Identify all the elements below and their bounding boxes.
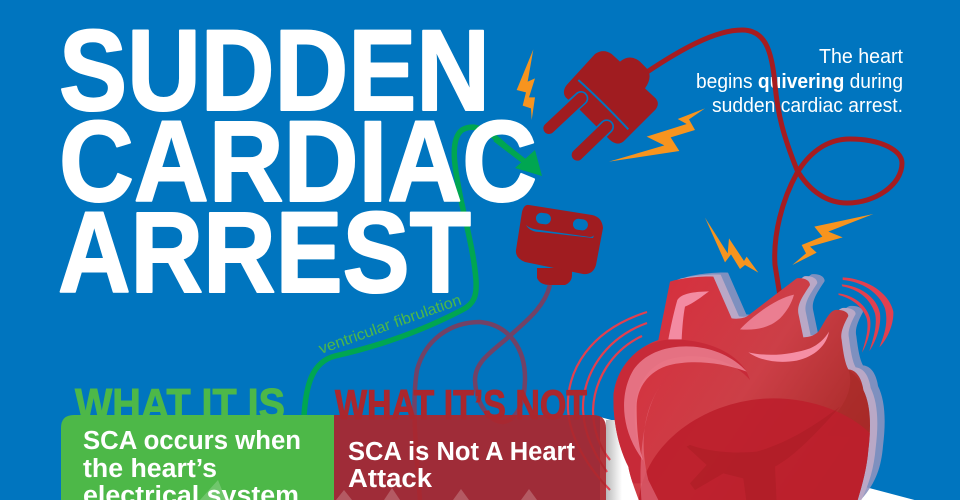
title [58,7,537,317]
cable from plug to heart [647,30,902,296]
white lower section [600,417,960,500]
title: SUDDEN [59,7,490,135]
panel: what it is [61,415,334,500]
heading: what it is: WHAT IT IS [75,380,285,429]
sound waves left of heart [568,312,647,490]
caption: heart begins quivering: The heart [819,46,903,68]
panel: what it is: the heart’s [83,455,217,483]
heart body [610,270,877,500]
highlight: middle vessel [740,295,794,330]
caption: heart begins quivering [696,46,903,117]
title: ARREST [58,189,471,317]
sound waves right of heart [838,277,893,353]
plug [549,51,658,155]
heart ghost outline near [677,275,877,500]
caption: heart begins quivering: begins quivering during [696,71,903,93]
highlight: main curve [624,346,747,461]
pad cable [414,285,550,500]
title: CARDIAC [59,98,537,226]
green arrow [495,139,542,176]
highlight: left vessel [668,291,709,339]
lightning bolts near heart [705,214,873,273]
label: ventricular fibrulation: ventricular fibrulation [317,292,464,358]
highlight: right vessel [748,332,829,362]
caption: heart begins quivering: sudden cardiac arrest. [712,95,903,117]
defibrillator pad connector [516,205,603,285]
panel: what it's not: SCA is Not A Heart [348,438,576,466]
lightning bolts near plug [517,49,705,162]
green ventricular fibrulation line [304,127,525,416]
highlight: inner stripe [641,383,662,500]
heart ghost outline far [685,273,885,499]
heart illustration [610,270,893,500]
heading: what it's not: WHAT IT’S NOT [335,381,587,428]
panel: what it's not: Attack [348,465,433,493]
panel: what it's not [334,415,606,500]
panel: what it is: SCA occurs when [83,427,301,455]
